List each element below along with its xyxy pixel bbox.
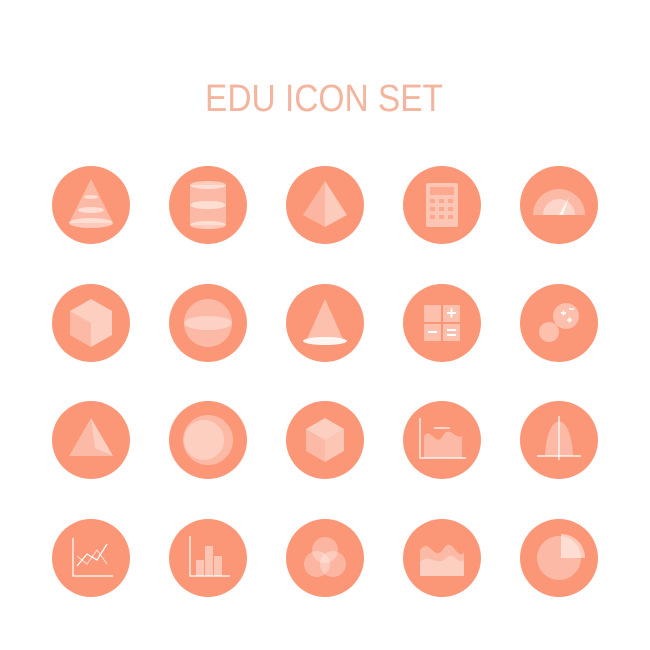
icon: cone on plate bbox=[286, 284, 364, 362]
icon: cube bbox=[286, 401, 364, 479]
icon: parabola bbox=[520, 401, 598, 479]
icon: wave area chart bbox=[403, 519, 481, 597]
icon: pie chart bbox=[520, 519, 598, 597]
icon: area chart bbox=[403, 401, 481, 479]
icon: bar chart bbox=[169, 519, 247, 597]
icon: pyramid bbox=[286, 166, 364, 244]
icon: hexagon cube bbox=[52, 284, 130, 362]
icon: tetrahedron bbox=[52, 401, 130, 479]
icon: moon sphere bbox=[169, 401, 247, 479]
icon: line chart bbox=[52, 519, 130, 597]
icon: speech bubbles bbox=[520, 284, 598, 362]
icon: cylinder bbox=[169, 166, 247, 244]
icon: cone bbox=[52, 166, 130, 244]
icon: gauge bbox=[520, 166, 598, 244]
icon: venn diagram bbox=[286, 519, 364, 597]
title: EDU ICON SET bbox=[205, 78, 443, 120]
icon: calculator bbox=[403, 166, 481, 244]
icon: sphere bbox=[169, 284, 247, 362]
icon: math tiles bbox=[403, 284, 481, 362]
